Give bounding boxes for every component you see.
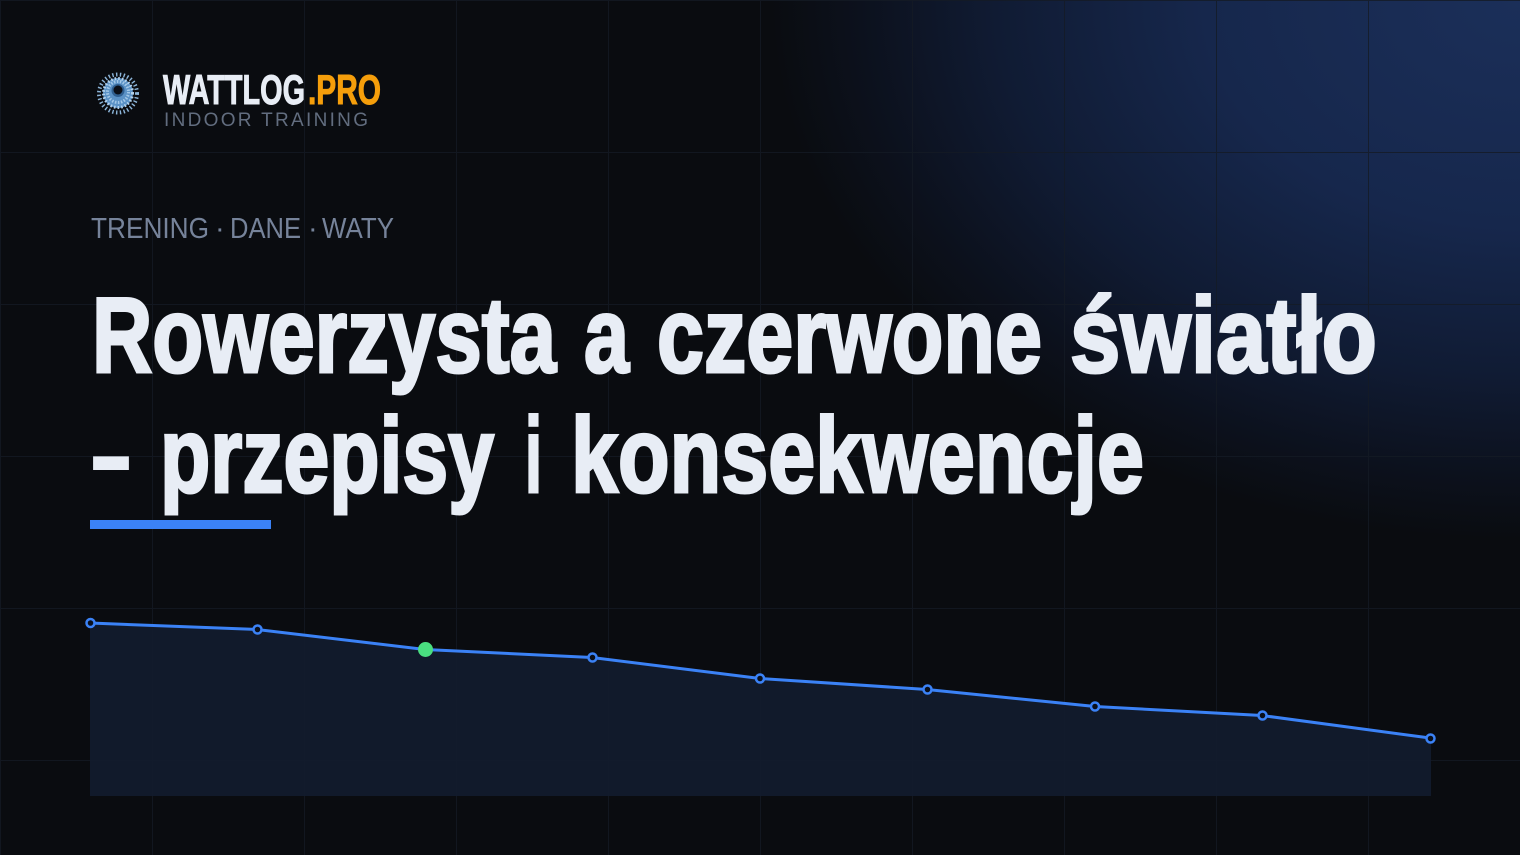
title: czerwone xyxy=(657,275,1042,395)
brand name: WATTLOG xyxy=(163,66,305,113)
brand tagline: INDOOR TRAINING xyxy=(164,110,368,131)
chart area fill xyxy=(90,623,1431,796)
title: przepisy xyxy=(160,395,494,515)
eyebrow text xyxy=(91,213,394,245)
brand name: .PRO xyxy=(308,66,381,113)
title: a xyxy=(584,275,630,395)
title: – xyxy=(92,395,130,515)
chart line xyxy=(90,623,1430,738)
eyebrow text: TRENING xyxy=(91,213,209,245)
eyebrow text: · xyxy=(215,213,225,245)
logo xyxy=(99,66,381,131)
eyebrow text: DANE xyxy=(230,213,301,245)
title: konsekwencje xyxy=(571,395,1144,515)
title: światło xyxy=(1070,275,1377,395)
highlighted green point xyxy=(418,642,433,657)
title: i xyxy=(525,395,542,515)
title: Rowerzysta xyxy=(92,275,557,395)
title accent underline xyxy=(90,520,271,529)
eyebrow text: WATY xyxy=(322,213,394,245)
eyebrow text: · xyxy=(308,213,318,245)
icon: cassette gear xyxy=(99,74,137,112)
chart points xyxy=(86,619,1434,742)
line chart: declining power xyxy=(86,619,1434,796)
title xyxy=(92,275,1377,515)
